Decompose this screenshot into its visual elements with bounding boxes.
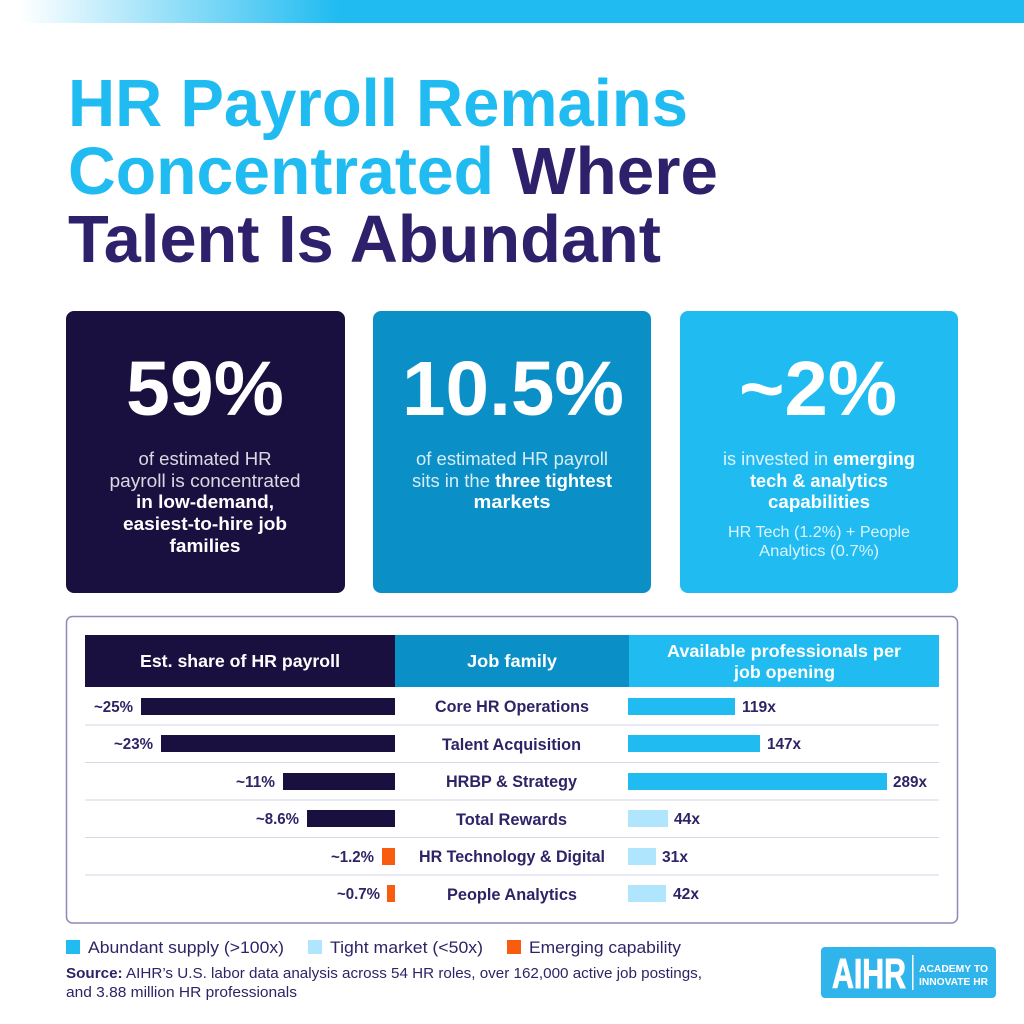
row: Total Rewards (256, 810, 700, 829)
title: Concentrated (68, 134, 494, 209)
row: Core HR Operations: Core HR Operations (435, 698, 589, 716)
title: Talent Is Abundant (68, 202, 661, 277)
stat footnote: Analytics (0.7%) (759, 543, 879, 560)
table header: Est. share of HR payroll (140, 651, 340, 671)
stat description 59%: families (170, 536, 240, 556)
row: Talent Acquisition: ~23% (114, 736, 153, 753)
row: Total Rewards: Total Rewards (456, 811, 567, 829)
legend (66, 939, 682, 957)
row: Core HR Operations (94, 698, 776, 716)
source note (66, 965, 702, 1001)
row: HRBP & Strategy: ~11% (236, 774, 275, 791)
row: Core HR Operations: ~25% (94, 699, 133, 716)
table header: Available professionals per (667, 641, 901, 661)
top gradient bar (0, 0, 1024, 23)
row: HRBP & Strategy: 289x (893, 774, 927, 791)
row: Talent Acquisition (114, 735, 801, 754)
stat description 59%: of estimated HR (138, 449, 272, 469)
source note: and 3.88 million HR professionals (66, 984, 297, 1001)
table header (85, 635, 939, 687)
stat description ~2%: capabilities (768, 492, 870, 512)
row: HR Technology & Digital: HR Technology & Digital (419, 848, 605, 866)
stat description ~2% (723, 449, 915, 512)
row: Total Rewards: ~8.6% (256, 811, 299, 828)
panel: 59% stat (66, 311, 345, 593)
stat number 10.5%: 10.5% (402, 346, 624, 432)
row: People Analytics (337, 885, 699, 904)
row: People Analytics: 42x (673, 886, 699, 903)
stat description 10.5%: markets (474, 492, 550, 512)
row: Talent Acquisition: 147x (767, 736, 801, 753)
row: People Analytics: People Analytics (447, 886, 577, 904)
stat description 59%: in low-demand, (136, 492, 274, 512)
legend: Emerging capability (529, 939, 682, 957)
row: HR Technology & Digital: ~1.2% (331, 849, 374, 866)
title: Where (512, 134, 718, 209)
stat description ~2%: is invested in emerging (723, 449, 915, 469)
stat number 59%: 59% (126, 346, 284, 432)
row: People Analytics: ~0.7% (337, 886, 380, 903)
panel: payroll table (66, 616, 958, 923)
stat description 59% (110, 449, 300, 556)
stat footnote: HR Tech (1.2%) + People (728, 524, 910, 541)
logo: AIHR: ACADEMY TO (919, 963, 988, 975)
stat description ~2%: tech & analytics (750, 471, 888, 491)
stat description 10.5% (412, 449, 612, 512)
row: Talent Acquisition: Talent Acquisition (442, 736, 581, 754)
row: HRBP & Strategy: HRBP & Strategy (446, 773, 578, 791)
stat description 59%: payroll is concentrated (110, 471, 300, 491)
row: HRBP & Strategy (236, 773, 927, 791)
source note: Source: AIHR’s U.S. labor data analysis across 54 HR roles, over 162,000 active job postings, (66, 965, 702, 982)
stat description 10.5%: of estimated HR payroll (416, 449, 608, 469)
legend: Tight market (<50x) (330, 939, 483, 957)
row: Core HR Operations: 119x (742, 699, 776, 716)
row: HR Technology & Digital: 31x (662, 849, 688, 866)
row: HR Technology & Digital (331, 848, 688, 866)
stat footnote (728, 524, 910, 560)
panel: 10.5% stat (373, 311, 651, 593)
row: Total Rewards: 44x (674, 811, 700, 828)
table header: job opening (733, 662, 835, 682)
title (68, 66, 718, 277)
logo: AIHR (821, 947, 996, 998)
stat description 59%: easiest-to-hire job (123, 514, 287, 534)
logo: AIHR: AIHR (832, 950, 906, 997)
title: HR Payroll Remains (68, 66, 688, 141)
panel: ~2% stat (680, 311, 958, 593)
logo: AIHR: INNOVATE HR (919, 976, 988, 988)
stat number ~2%: ~2% (739, 346, 897, 432)
table header: Job family (467, 651, 557, 671)
legend: Abundant supply (>100x) (88, 939, 284, 957)
stat description 10.5%: sits in the three tightest (412, 471, 612, 491)
